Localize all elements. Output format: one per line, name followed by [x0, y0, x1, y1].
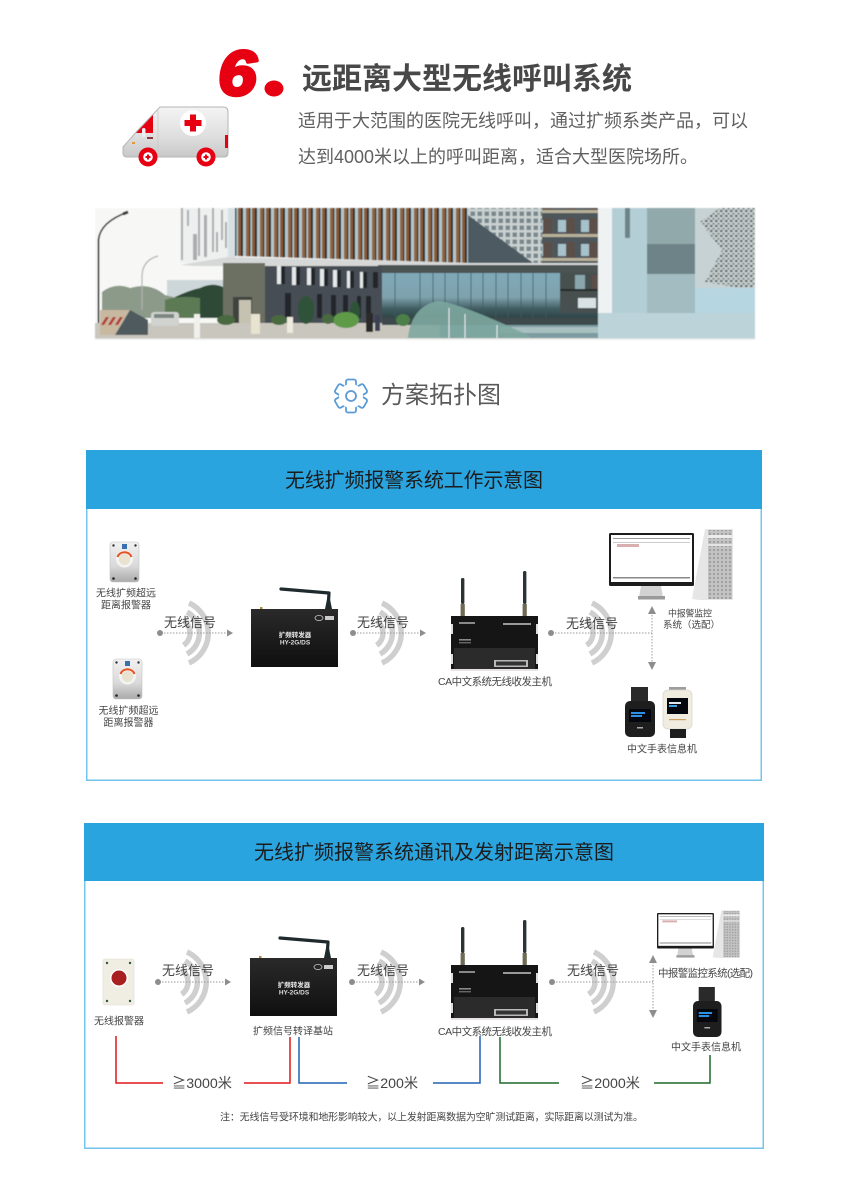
device: repeater: HY-2G/DS	[279, 990, 310, 996]
range: 2000 m: ≧2000米	[580, 1076, 640, 1092]
device: watch	[671, 987, 741, 1054]
device: monitoring computer	[609, 529, 733, 631]
device: watches	[625, 687, 697, 756]
device: host	[438, 571, 552, 688]
signal 2	[350, 603, 426, 663]
device: alarm 2: 距离报警器	[104, 716, 154, 729]
device: alarm	[94, 959, 144, 1028]
range: 200 m	[299, 1036, 480, 1092]
panel header	[86, 450, 762, 509]
signal 2	[349, 952, 425, 1012]
signal 3 with split arrow	[549, 952, 657, 1018]
device: host	[438, 920, 552, 1038]
panel: distance diagram	[84, 823, 764, 1148]
device: host: CA中文系统无线收发主机	[438, 1025, 552, 1038]
signal 1	[157, 603, 233, 663]
range: 2000 m	[500, 1037, 710, 1092]
range: 200 m: ≧200米	[366, 1076, 418, 1092]
panel header	[84, 823, 764, 881]
signal 1	[155, 952, 231, 1012]
device: repeater: 扩频信号转译基站	[253, 1024, 333, 1038]
range: 3000 m: ≧3000米	[172, 1076, 232, 1092]
device: alarm 1: 无线扩频超远	[96, 586, 156, 600]
device: watch: 中文手表信息机	[671, 1040, 741, 1054]
device: monitoring computer: 中报警监控	[668, 608, 712, 618]
title: 远距离大型无线呼叫系统	[302, 63, 632, 96]
signal 3 with split arrow: 无线信号	[566, 616, 618, 631]
device: alarm 1	[96, 542, 156, 612]
device: monitoring computer: 系统（选配）	[663, 619, 720, 631]
intro text: 适用于大范围的医院无线呼叫，通过扩频系类产品，可以	[298, 111, 748, 131]
signal 1: 无线信号	[164, 615, 216, 630]
intro text: 达到4000米以上的呼叫距离，适合大型医院场所。	[298, 147, 698, 167]
signal 2: 无线信号	[357, 615, 409, 630]
section number 6: 6	[218, 39, 258, 109]
device: repeater	[250, 938, 337, 1038]
device: monitoring computer: 中报警监控系统(选配)	[658, 966, 753, 980]
device: repeater	[251, 589, 338, 667]
section number 6	[218, 39, 284, 109]
device: monitoring computer	[657, 910, 753, 980]
device: alarm 2: 无线扩频超远	[98, 704, 158, 717]
device: watches: 中文手表信息机	[627, 742, 697, 756]
panel: working diagram	[86, 450, 762, 780]
heading: topology: 方案拓扑图	[381, 382, 501, 409]
device: repeater: HY-2G/DS	[280, 640, 311, 646]
icon: gear	[334, 380, 368, 412]
panel title: 无线扩频报警系统工作示意图	[285, 469, 543, 492]
device: alarm: 无线报警器	[94, 1014, 144, 1028]
icon: ambulance	[123, 107, 228, 166]
signal 3 with split arrow	[548, 603, 656, 670]
signal 3 with split arrow: 无线信号	[567, 963, 619, 978]
note: 注：无线信号受环境和地形影响较大，以上发射距离数据为空旷测试距离，实际距离以测试为准。	[220, 1110, 643, 1124]
signal 2: 无线信号	[357, 963, 409, 978]
range: 3000 m	[116, 1036, 290, 1092]
device: alarm 2	[98, 659, 158, 729]
signal 1: 无线信号	[162, 963, 214, 978]
device: repeater: 扩频转发器	[278, 980, 311, 989]
panel title: 无线扩频报警系统通讯及发射距离示意图	[254, 841, 614, 864]
intro text	[298, 111, 748, 167]
device: host: CA中文系统无线收发主机	[438, 675, 552, 688]
device: alarm 1: 距离报警器	[101, 598, 151, 612]
photo: hospital building	[95, 208, 755, 340]
device: repeater: 扩频转发器	[279, 630, 312, 639]
